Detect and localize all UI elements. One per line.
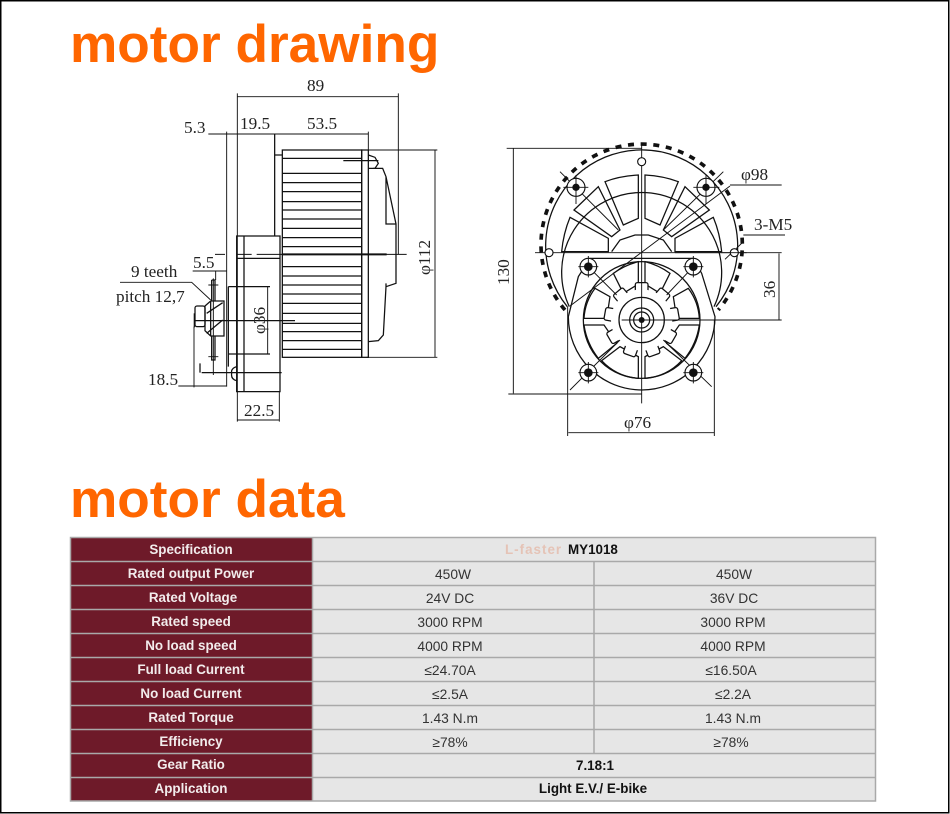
- row: rated torque: Rated Torque: [148, 710, 234, 725]
- shaft sprocket and nut: [194, 278, 295, 375]
- row: rated torque: 1.43 N.m: [705, 711, 761, 726]
- row: rated torque: [148, 710, 761, 726]
- dimension labels: side view: 5.5: [193, 253, 214, 272]
- lower spoke windows: [584, 262, 699, 378]
- dimension lines: [120, 93, 437, 422]
- toothed gear rim: [541, 144, 742, 310]
- row: specification: MY1018: [568, 542, 618, 557]
- row: full load current: ≤16.50A: [705, 663, 757, 678]
- title: motor drawing: motor drawing: [70, 15, 439, 74]
- row: no load current: No load Current: [140, 686, 242, 701]
- row: no load current: [140, 686, 752, 702]
- row: specification: L-faster: [505, 542, 562, 557]
- row: application: [155, 781, 647, 796]
- row: application: Application: [155, 781, 227, 796]
- row: rated output power: 450W: [716, 567, 752, 582]
- dimension labels: front view: φ98: [741, 165, 768, 184]
- row: no load speed: 4000 RPM: [417, 639, 483, 654]
- row: specification: [149, 542, 618, 557]
- row: no load speed: [145, 638, 766, 654]
- housing inner circle: [583, 262, 700, 378]
- motor end cap: [368, 168, 396, 342]
- row: rated speed: 3000 RPM: [700, 615, 766, 630]
- row: rated voltage: [149, 590, 758, 606]
- dimension labels: side view: 5.3: [184, 118, 205, 137]
- dimension lines: [507, 148, 785, 436]
- dimension labels: side view: φ112: [415, 240, 434, 275]
- row: rated speed: [151, 614, 766, 630]
- row: gear ratio: [157, 757, 615, 773]
- row: rated torque: 1.43 N.m: [422, 711, 478, 726]
- gearbox housing: [237, 134, 282, 392]
- dimension labels: side view: 18.5: [148, 370, 178, 389]
- dimension labels: side view: 53.5: [307, 114, 337, 133]
- dimension labels: side view: 22.5: [244, 401, 274, 420]
- front view drawing of motor: [507, 143, 785, 436]
- row: rated voltage: 36V DC: [710, 591, 758, 606]
- motor finned body: [282, 150, 368, 357]
- row: gear ratio: Gear Ratio: [157, 757, 225, 772]
- row: specification: Specification: [149, 542, 233, 557]
- dimension labels: front view: 36: [760, 280, 779, 298]
- dimension labels: front view: 130: [494, 259, 513, 285]
- sprocket: [604, 283, 680, 357]
- row: rated output power: [128, 566, 752, 582]
- row: full load current: Full load Current: [137, 662, 245, 677]
- row: rated speed: 3000 RPM: [417, 615, 483, 630]
- row: application: Light E.V./ E-bike: [539, 781, 647, 796]
- dimension labels: side view: 19.5: [240, 114, 270, 133]
- dimension labels: side view: φ36: [250, 306, 269, 334]
- end cap screw: [343, 155, 378, 168]
- centre and leader lines: [535, 143, 747, 403]
- title: motor data: motor data: [70, 470, 345, 529]
- mounting bolts: [545, 158, 738, 383]
- row: full load current: [137, 662, 757, 678]
- row: rated output power: Rated output Power: [128, 566, 255, 581]
- row: rated speed: Rated speed: [151, 614, 231, 629]
- row: efficiency: ≥78%: [432, 735, 468, 750]
- row: no load speed: No load speed: [145, 638, 237, 653]
- dimension labels: side view: pitch 12,7: [116, 287, 185, 306]
- inner ring: [562, 192, 722, 307]
- upper spoke windows: [562, 175, 722, 252]
- motor data table: [70, 538, 876, 801]
- dimension labels: front view: φ76: [624, 413, 652, 432]
- dimension labels: side view: [116, 76, 434, 420]
- row: efficiency: ≥78%: [713, 735, 749, 750]
- row: rated voltage: Rated Voltage: [149, 590, 237, 605]
- dimension labels: side view: 89: [307, 76, 324, 95]
- gearbox housing outline: [568, 258, 715, 390]
- row: no load current: ≤2.5A: [432, 687, 469, 702]
- row: rated voltage: 24V DC: [426, 591, 474, 606]
- dimension labels: front view: [494, 165, 792, 432]
- row: efficiency: Efficiency: [159, 734, 223, 749]
- row: full load current: ≤24.70A: [424, 663, 476, 678]
- row: rated output power: 450W: [435, 567, 471, 582]
- row: gear ratio: 7.18:1: [576, 758, 615, 773]
- row: efficiency: [159, 734, 749, 750]
- dimension labels: side view: 9 teeth: [131, 262, 178, 281]
- row: no load speed: 4000 RPM: [700, 639, 766, 654]
- centre line: [215, 253, 407, 256]
- row: no load current: ≤2.2A: [715, 687, 752, 702]
- dimension labels: front view: 3-M5: [754, 215, 792, 234]
- table backgrounds: [70, 538, 876, 801]
- side view drawing of motor: [120, 93, 437, 422]
- mount flange: [200, 287, 282, 381]
